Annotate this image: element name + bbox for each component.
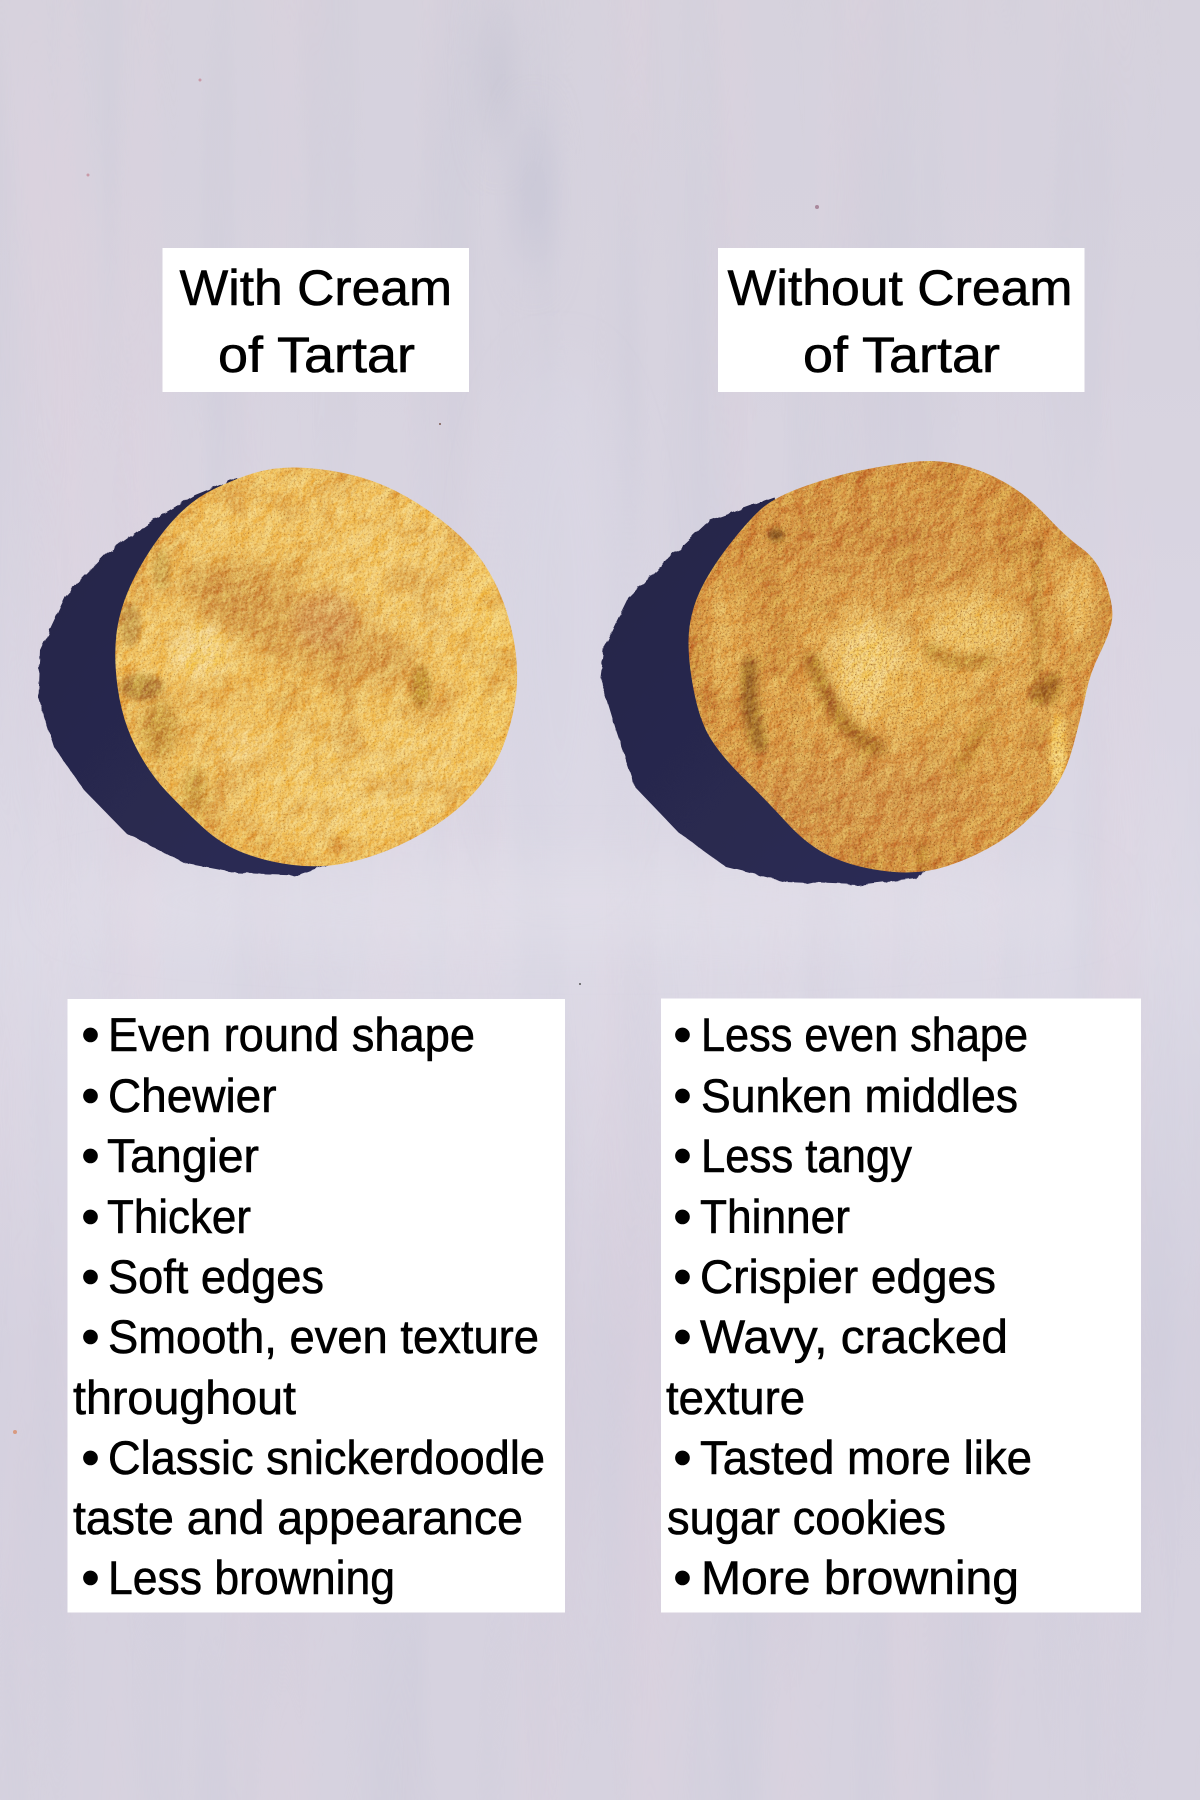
trait: even round shape: •: [81, 1006, 100, 1064]
trait: wavy cracked texture: texture: [666, 1371, 805, 1424]
heading: with cream of tartar: of Tartar: [218, 327, 415, 383]
trait: even round shape: Even round shape: [108, 1008, 475, 1061]
trait: thicker: Thicker: [107, 1190, 251, 1243]
trait: sunken middles: Sunken middles: [701, 1069, 1018, 1122]
trait: less browning: •: [81, 1549, 100, 1607]
cookie creases: [749, 540, 1052, 870]
trait: tangier: Tangier: [107, 1129, 259, 1182]
trait: smooth even texture: throughout: [73, 1371, 296, 1424]
trait: classic snickerdoodle: taste and appearance: [73, 1491, 523, 1544]
trait: less even shape: Less even shape: [701, 1008, 1028, 1061]
trait: soft edges: •: [81, 1248, 100, 1306]
trait: less tangy: •: [673, 1127, 692, 1185]
trait: crispier edges: •: [673, 1248, 692, 1306]
trait: more browning: More browning: [701, 1551, 1019, 1604]
trait: chewier: Chewier: [108, 1069, 276, 1122]
trait: crispier edges: Crispier edges: [700, 1250, 996, 1303]
panel: with cream of tartar traits: [68, 999, 565, 1612]
shadow of round cookie: [38, 478, 340, 875]
trait: classic snickerdoodle: Classic snickerdoodle: [108, 1431, 545, 1484]
cookie photo: without cream of tartar: [600, 450, 1125, 885]
trait: less tangy: Less tangy: [701, 1129, 912, 1182]
heading: with cream of tartar: [162, 248, 469, 392]
trait: wavy cracked texture: •: [673, 1308, 692, 1366]
trait: wavy cracked texture: [666, 1308, 1008, 1424]
trait: wavy cracked texture: Wavy, cracked: [700, 1310, 1008, 1363]
trait: tasted more like sugar cookies: •: [673, 1429, 692, 1487]
trait: chewier: •: [81, 1067, 100, 1125]
cookie photo: with cream of tartar: [38, 455, 530, 880]
heading: without cream of tartar: [718, 248, 1084, 392]
trait: tasted more like sugar cookies: sugar cookies: [667, 1491, 946, 1544]
trait: smooth even texture: [73, 1308, 539, 1424]
trait: smooth even texture: Smooth, even texture: [108, 1310, 539, 1363]
trait: less even shape: •: [673, 1006, 692, 1064]
trait: tasted more like sugar cookies: Tasted more like: [700, 1431, 1032, 1484]
trait: thinner: Thinner: [700, 1190, 850, 1243]
trait: smooth even texture: •: [81, 1308, 100, 1366]
trait: more browning: •: [673, 1549, 692, 1607]
trait: sunken middles: •: [673, 1067, 692, 1125]
trait: soft edges: Soft edges: [108, 1250, 324, 1303]
trait: classic snickerdoodle: •: [81, 1429, 100, 1487]
trait: thinner: •: [673, 1188, 692, 1246]
heading: without cream of tartar: of Tartar: [803, 327, 1000, 383]
heading: with cream of tartar: With Cream: [180, 260, 452, 316]
round cookie: [115, 468, 518, 866]
trait: tasted more like sugar cookies: [667, 1429, 1032, 1544]
trait: thicker: •: [81, 1188, 100, 1246]
panel: without cream of tartar traits: [661, 998, 1141, 1612]
trait: tangier: •: [81, 1127, 100, 1185]
heading: without cream of tartar: Without Cream: [728, 260, 1072, 316]
shadow of uneven cookie: [600, 497, 950, 885]
trait: less browning: Less browning: [108, 1551, 395, 1604]
uneven cookie: [688, 461, 1112, 872]
trait: classic snickerdoodle: [73, 1429, 545, 1544]
